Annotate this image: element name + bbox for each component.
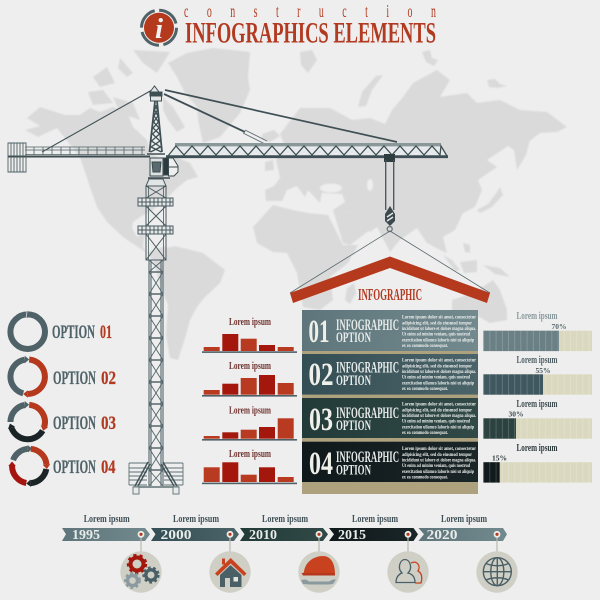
bar chart 2: Lorem ipsum (229, 361, 271, 372)
row 03: OPTION (336, 418, 371, 434)
icon: hard hat and wrench (301, 556, 336, 584)
progress 70%: Lorem ipsum (516, 310, 558, 322)
option 02 (10, 356, 116, 398)
row 02: OPTION (336, 373, 371, 389)
bar chart 2 (202, 361, 297, 397)
panel: house option rows (302, 310, 478, 494)
row 01 (302, 310, 478, 351)
timeline 2015 (329, 514, 429, 593)
timeline 2015: 2015 (338, 527, 366, 542)
row 03: 03 (309, 402, 333, 438)
timeline 2010: 2010 (249, 527, 277, 542)
icon: info badge: i (155, 13, 163, 45)
row 03: Ut enim ad minim veniam, quis nostrud (402, 420, 470, 425)
row 01: exercitation ullamco laboris nisi ut aliquip (402, 338, 474, 343)
timeline 2020: Lorem ipsum (441, 514, 487, 525)
row 01: adipisicing elit, sed do eiusmod tempor (402, 321, 473, 326)
progress 55% (483, 354, 592, 395)
progress 15%: 15% (492, 454, 507, 462)
row 01: incididunt ut labore et dolore magna aliqua. (402, 327, 476, 332)
option 03 (6, 401, 116, 439)
option 02: OPTION (53, 368, 96, 389)
row 03: adipisicing elit, sed do eiusmod tempor (402, 408, 473, 413)
bar chart 4: Lorem ipsum (229, 449, 271, 460)
option 03: OPTION (53, 413, 96, 434)
row 03: incididunt ut labore et dolore magna aliqua. (402, 414, 476, 419)
crane top (147, 86, 165, 154)
row 01: OPTION (336, 330, 371, 346)
row 03: Lorem ipsum dolor sit amet, consectetur (402, 402, 477, 408)
bar chart 1: Lorem ipsum (229, 317, 271, 328)
progress 55%: Lorem ipsum (516, 354, 558, 366)
option 03: 03 (101, 413, 116, 434)
crane stay cables (42, 90, 397, 152)
option 04: 04 (101, 457, 116, 478)
icon: globe (483, 558, 511, 586)
progress 15% (483, 442, 592, 483)
option 04: OPTION (53, 457, 96, 478)
row 04: 04 (309, 446, 333, 482)
progress 70% (483, 310, 592, 351)
option 01 (10, 311, 112, 349)
icon: house (215, 558, 246, 587)
progress 55%: 55% (536, 366, 550, 375)
operator cab (148, 158, 178, 178)
row 03: ex ea commodo consequat. (402, 431, 448, 436)
timeline 2000: 2000 (160, 527, 192, 542)
panel: timeline (62, 514, 518, 593)
row 02: adipisicing elit, sed do eiusmod tempor (402, 364, 473, 369)
timeline 2020: 2020 (426, 527, 458, 542)
option 01: OPTION (52, 322, 95, 343)
timeline 2020 (418, 514, 518, 593)
row 04: adipisicing elit, sed do eiusmod tempor (402, 453, 473, 458)
row 02: incididunt ut labore et dolore magna aliqua. (402, 370, 476, 375)
row 01: INFOGRAPHIC (336, 317, 399, 334)
row 01: 01 (308, 314, 330, 350)
timeline 1995 (62, 514, 162, 593)
subtitle: construction (184, 2, 436, 22)
timeline 2010: Lorem ipsum (262, 514, 308, 525)
bar chart 1 (202, 317, 297, 353)
row 04: ex ea commodo consequat. (402, 476, 448, 480)
panel: option rings (6, 311, 116, 487)
timeline 2015: Lorem ipsum (352, 514, 398, 525)
row 03 (302, 398, 478, 438)
row 01: Ut enim ad minim veniam, quis nostrud (402, 333, 470, 338)
option 04 (8, 445, 116, 487)
trolley and hoist ropes (384, 154, 395, 210)
bar chart 3: Lorem ipsum (229, 406, 271, 416)
option 01: 01 (100, 322, 112, 343)
row 02: Lorem ipsum dolor sit amet, consectetur (402, 358, 477, 364)
timeline 2000 (151, 514, 251, 593)
row 02: INFOGRAPHIC (336, 360, 399, 376)
row 04: OPTION (336, 462, 371, 478)
tower crane (8, 86, 490, 494)
row 04 (302, 442, 478, 482)
row 04: exercitation ullamco laboris nisi ut aliquip (402, 470, 474, 475)
row 02: 02 (308, 357, 334, 393)
panel: small bar charts (202, 317, 297, 484)
bar chart 3 (202, 406, 297, 441)
counter-jib (8, 143, 150, 172)
row 02: Ut enim ad minim veniam, quis nostrud (402, 376, 470, 381)
crane mast (149, 260, 163, 486)
row 04: INFOGRAPHIC (336, 449, 399, 466)
row 02 (302, 354, 478, 395)
turntable and collars (138, 179, 173, 260)
row 02: ex ea commodo consequat. (402, 387, 448, 392)
timeline 2000: Lorem ipsum (173, 514, 219, 525)
world map background (25, 48, 567, 360)
row 03: INFOGRAPHIC (336, 405, 399, 422)
jib truss (166, 145, 448, 157)
main title: INFOGRAPHICS ELEMENTS (185, 16, 436, 50)
timeline 1995: Lorem ipsum (84, 514, 130, 525)
row 04: Ut enim ad minim veniam, quis nostrud (402, 464, 470, 469)
row 01: ex ea commodo consequat. (402, 344, 448, 349)
progress 70%: 70% (552, 322, 566, 331)
bar chart 4 (202, 449, 297, 484)
row 04: incididunt ut labore et dolore magna aliqua. (402, 458, 476, 464)
progress 30%: 30% (508, 410, 524, 418)
progress 30% (483, 398, 592, 439)
title block (142, 2, 436, 50)
timeline 2010 (240, 514, 340, 593)
row 02: exercitation ullamco laboris nisi ut aliquip (402, 381, 474, 386)
sling cables (290, 231, 490, 293)
icon: people (396, 560, 422, 583)
timeline 1995: 1995 (72, 527, 100, 542)
progress 15%: Lorem ipsum (516, 442, 558, 454)
row 01: Lorem ipsum dolor sit amet, consectetur (402, 316, 477, 320)
crane base and ballast (129, 462, 183, 494)
crane hook (385, 206, 395, 232)
option 02: 02 (101, 368, 116, 389)
progress 30%: Lorem ipsum (516, 398, 558, 410)
row 04: Lorem ipsum dolor sit amet, consectetur (402, 447, 477, 452)
icon: info badge (142, 10, 176, 45)
row 03: exercitation ullamco laboris nisi ut aliquip (402, 425, 474, 430)
roof heading: INFOGRAPHIC (358, 285, 422, 304)
red roof (290, 256, 490, 303)
icon: gears (125, 555, 159, 588)
panel: progress bars (483, 310, 592, 483)
